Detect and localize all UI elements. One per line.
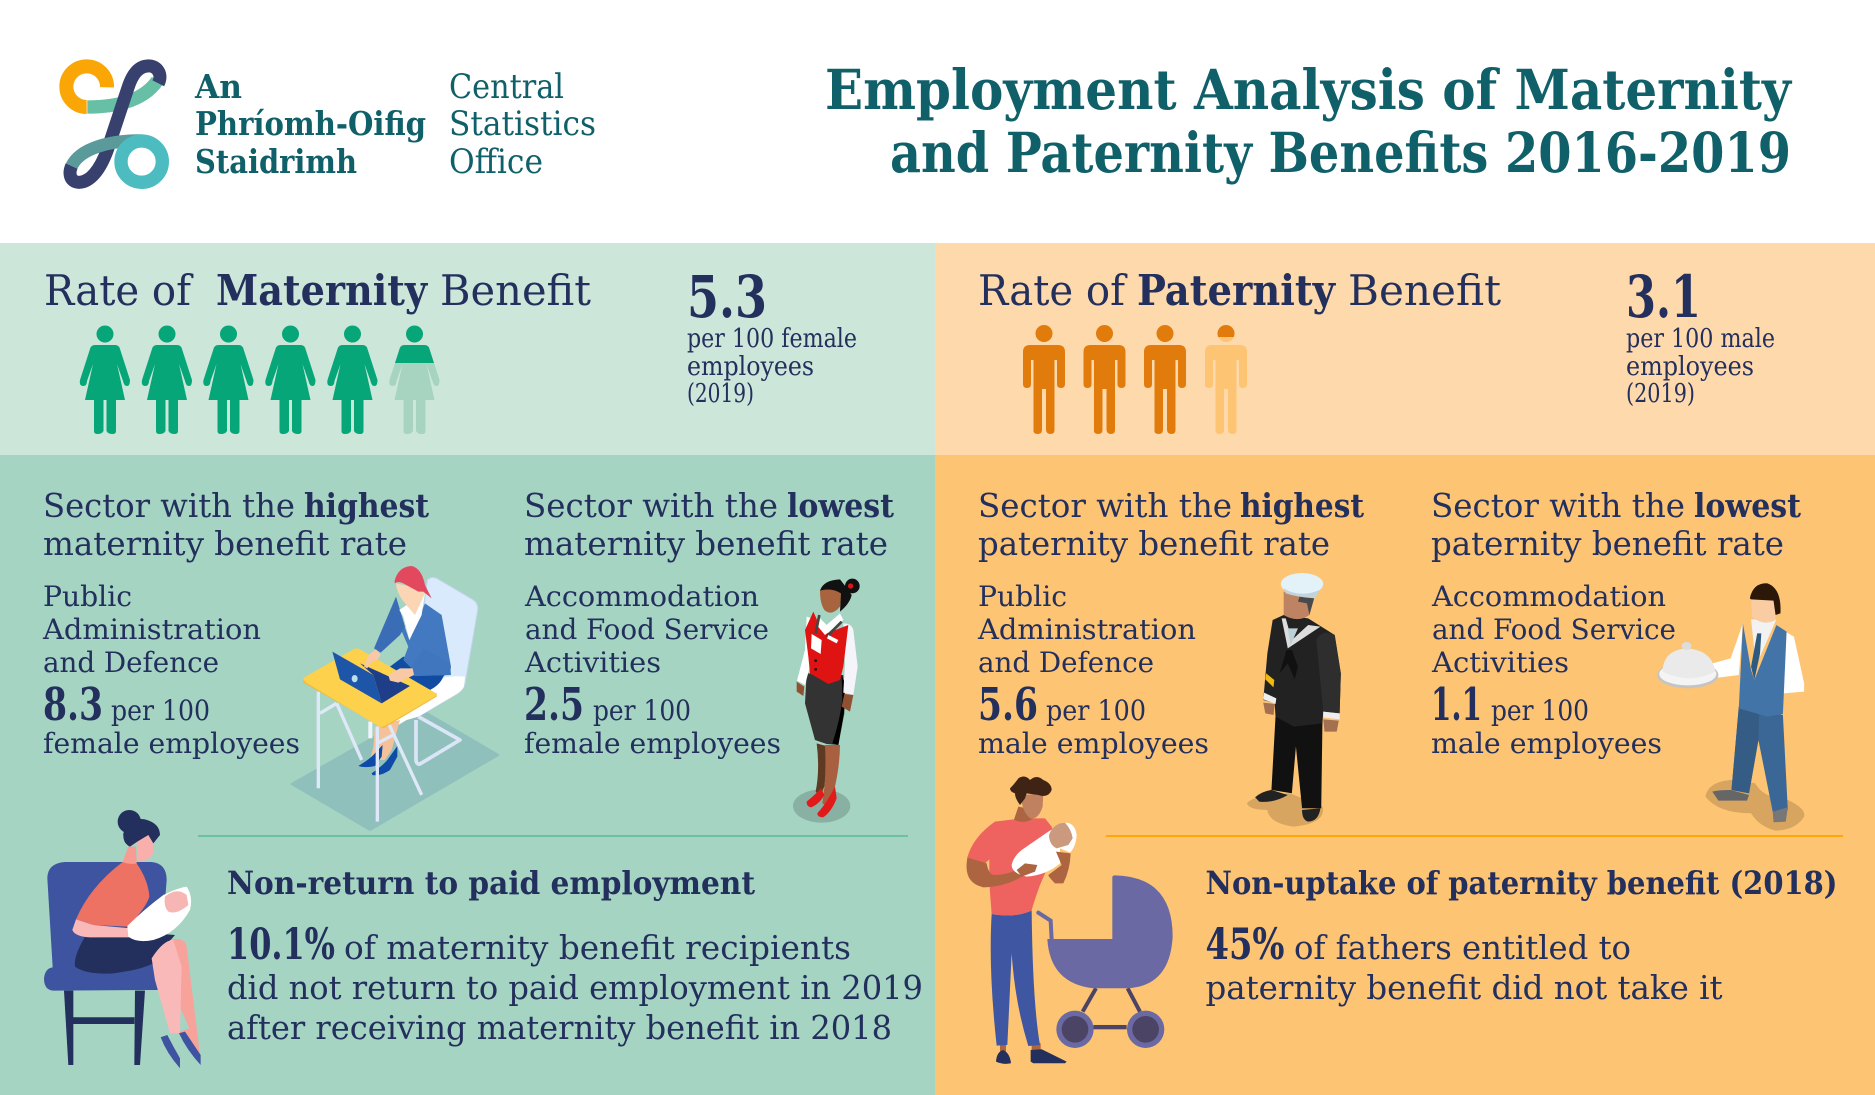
text: sector with lowest paternity rate: lowest [1694,486,1801,525]
illustration: hospitality waitress [793,579,860,823]
text: non-uptake of paternity benefit: paternity benefit did not take it [1206,968,1723,1007]
text: non-uptake of paternity benefit: of fathers entitled to [1294,928,1631,967]
text: sector with highest maternity rate: and Defence [43,646,219,679]
text: sector with lowest maternity rate: maternity benefit rate [524,524,888,563]
text: sector with lowest maternity rate: lowest [787,486,894,525]
text: sector with lowest maternity rate: 2.5 [524,678,584,731]
text: sector with highest maternity rate: female employees [43,727,300,760]
stat: 3.1 per 100 male employees: 3.1 [1626,263,1701,331]
text: sector with highest maternity rate: highest [304,486,429,525]
text: sector with highest paternity rate: paternity benefit rate [978,524,1330,563]
text: non-uptake of paternity benefit: 45% [1206,920,1284,970]
text: sector with highest paternity rate: per 100 [1046,694,1146,727]
text: sector with lowest paternity rate: paternity benefit rate [1431,524,1784,563]
logo name in English: Statistics [449,104,596,144]
text: sector with highest maternity rate: per 100 [111,694,210,727]
text: sector with lowest paternity rate [1431,486,1801,760]
stat: 3.1 per 100 male employees: per 100 male [1626,324,1775,354]
text: sector with lowest maternity rate [524,486,894,760]
text: non-uptake of paternity benefit [1206,864,1838,1007]
text: non-return to paid employment: 10.1% [227,920,335,970]
panel: rate of paternity benefit [935,243,1875,455]
logo mark [66,66,162,182]
heading: rate of maternity benefit: Maternity [216,266,428,315]
heading: rate of maternity benefit: Benefit [440,266,591,315]
text: sector with highest paternity rate: Sector with the [978,486,1232,525]
text: non-return to paid employment [227,864,923,1047]
stat: 5.3 per 100 female employees: per 100 female [687,324,857,354]
stat: 3.1 per 100 male employees: (2019) [1626,379,1695,409]
text: sector with lowest maternity rate: and Food Service [525,613,769,646]
illustration: woman working at laptop [292,566,498,830]
text: sector with lowest paternity rate: Activities [1431,646,1569,679]
text: sector with lowest paternity rate: and Food Service [1432,613,1676,646]
stat: 5.3 per 100 female employees: (2019) [687,379,754,409]
heading: rate of maternity benefit [44,266,591,315]
logo name in Irish [194,67,426,181]
logo name in English: Central [449,67,564,107]
text: sector with lowest maternity rate: Activities [524,646,661,679]
heading: rate of paternity benefit: Benefit [1348,266,1501,315]
text: sector with lowest paternity rate: 1.1 [1431,678,1482,731]
text: non-return to paid employment: Non-return to paid employment [227,864,756,902]
logo name in Irish: An [194,67,242,106]
header band [0,0,1875,243]
text: sector with lowest paternity rate: Accommodation [1431,580,1666,613]
icons: women pictogram 5.3 of 6 [80,326,440,434]
icons: men pictogram 3.1 of 4 [1023,325,1247,434]
text: sector with lowest paternity rate: Sector with the [1431,486,1685,525]
text: non-return to paid employment: of maternity benefit recipients [344,928,851,967]
text: sector with highest maternity rate: Administration [42,613,261,646]
text: sector with lowest maternity rate: per 100 [593,694,691,727]
text: sector with highest paternity rate: Public [978,580,1067,613]
text: sector with highest paternity rate: and Defence [978,646,1154,679]
title: Employment Analysis of Maternity [825,57,1792,122]
text: sector with highest maternity rate: Sector with the [43,486,295,525]
heading: rate of paternity benefit: Rate of [978,266,1128,315]
logo name in English [449,67,596,182]
heading: rate of paternity benefit [978,266,1501,315]
text: sector with highest paternity rate: 5.6 [978,678,1038,731]
text: non-uptake of paternity benefit: Non-uptake of paternity benefit (2018) [1206,864,1838,902]
text: sector with highest maternity rate: maternity benefit rate [43,524,407,563]
text: sector with lowest maternity rate: female employees [524,727,781,760]
logo: Central Statistics Office [66,66,596,182]
panel: maternity sectors and non-return [0,455,935,1095]
text: sector with lowest paternity rate: male employees [1431,727,1662,760]
text: sector with highest maternity rate: Public [43,580,132,613]
text: sector with highest maternity rate [42,486,429,760]
panel: rate of maternity benefit [0,243,935,455]
logo name in Irish: Phríomh-Oifig [195,104,426,143]
logo name in Irish: Staidrimh [195,142,357,181]
text: sector with lowest paternity rate: per 100 [1491,694,1589,727]
illustration: father holding baby with pram [967,777,1173,1064]
stat: 5.3 per 100 female employees [687,263,857,409]
panel: paternity sectors and non-uptake [935,455,1875,1095]
illustration: navy sailor [1247,573,1341,827]
text: sector with lowest maternity rate: Sector with the [524,486,778,525]
stat: 5.3 per 100 female employees: employees [687,352,814,382]
text: sector with lowest maternity rate: Accommodation [524,580,759,613]
text: sector with highest paternity rate: Administration [977,613,1196,646]
stat: 5.3 per 100 female employees: 5.3 [687,263,767,331]
logo name in English: Office [449,142,543,182]
stat: 3.1 per 100 male employees: employees [1626,352,1754,382]
text: sector with highest paternity rate: male employees [978,727,1209,760]
text: sector with highest paternity rate [977,486,1364,760]
heading: rate of paternity benefit: Paternity [1137,266,1336,315]
divider [1106,835,1843,837]
illustration: waiter with cloche [1657,583,1804,831]
text: non-return to paid employment: after receiving maternity benefit in 2018 [227,1008,892,1047]
stat: 3.1 per 100 male employees [1626,263,1775,409]
text: sector with highest maternity rate: 8.3 [43,678,103,731]
text: sector with highest paternity rate: highest [1240,486,1364,525]
divider [198,835,908,837]
title: and Paternity Benefits 2016-2019 [890,120,1791,185]
text: non-return to paid employment: did not return to paid employment in 2019 [227,968,923,1007]
illustration: mother nursing baby in chair [44,810,201,1068]
title [825,57,1792,185]
heading: rate of maternity benefit: Rate of [44,266,194,315]
